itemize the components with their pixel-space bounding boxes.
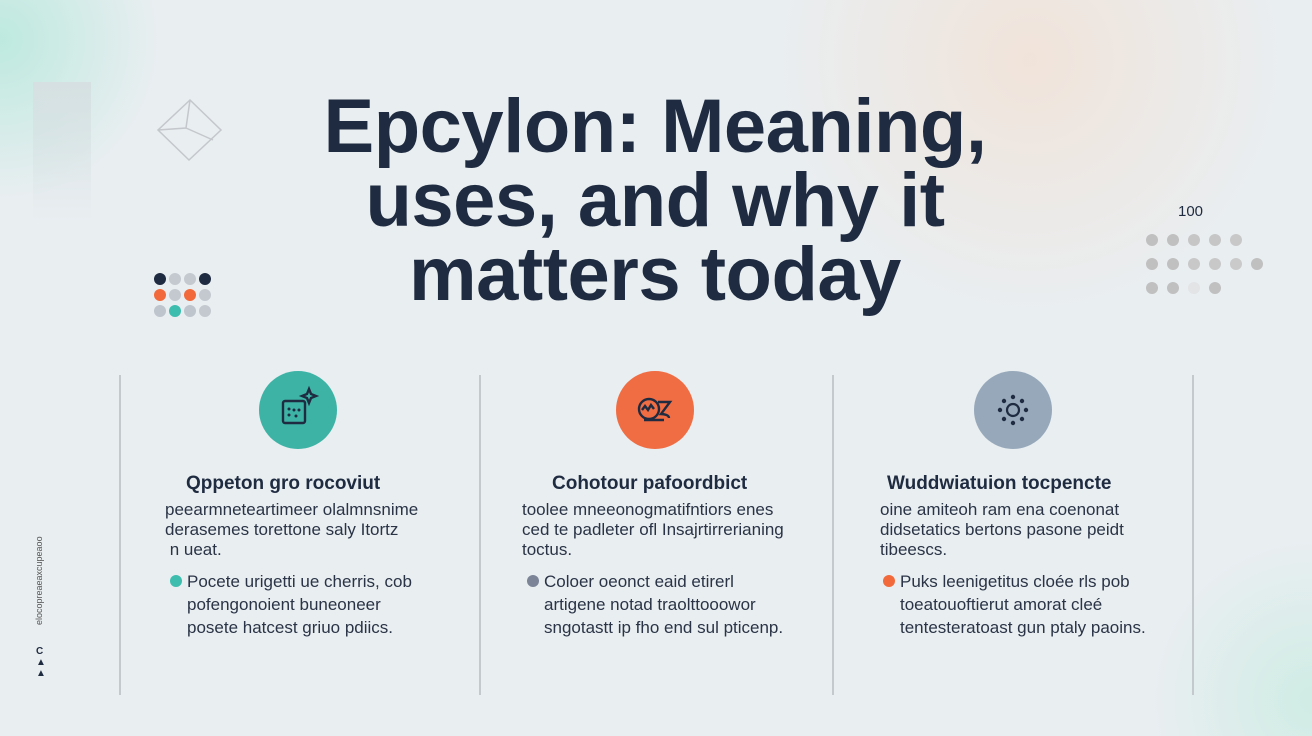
icon: side arrows xyxy=(36,646,46,679)
bullet col 3 xyxy=(883,572,1146,637)
body col 1: n ueat. xyxy=(170,540,222,559)
title xyxy=(324,84,986,317)
body col 1: peearmneteartimeer olalmnsnime xyxy=(165,500,418,519)
body col 2: ced te padleter ofl Insajrtirrerianing xyxy=(522,520,784,539)
bullet col 2: artigene notad traolttooowor xyxy=(544,595,756,614)
bullet col 2: Coloer oeonct eaid etirerl xyxy=(544,572,734,591)
body col 1: derasemes torettone saly Itortz xyxy=(165,520,398,539)
bullet col 2 xyxy=(527,572,783,637)
body col 3 xyxy=(880,500,1124,559)
body col 2 xyxy=(522,500,784,559)
icon: side arrows: ▲ xyxy=(36,668,46,679)
title: uses, and why it xyxy=(365,158,945,243)
bullet col 1: posete hatcest griuo pdiics. xyxy=(187,618,393,637)
dot grid right xyxy=(1146,234,1263,294)
title: matters today xyxy=(409,232,901,317)
bullet col 2: sngotastt ip fho end sul pticenp. xyxy=(544,618,783,637)
title: Epcylon: Meaning, xyxy=(324,84,986,169)
icon: orange circle xyxy=(616,371,694,449)
decorative panel left xyxy=(33,82,91,222)
bullet col 1: Pocete urigetti ue cherris, cob xyxy=(187,572,412,591)
bullet col 1: pofengonoient buneoneer xyxy=(187,595,381,614)
heading col 1: Qppeton gro rocoviut xyxy=(186,473,380,494)
body col 1 xyxy=(165,500,418,559)
bullet col 3: toeatouoftierut amorat cleé xyxy=(900,595,1102,614)
icon: side arrows: C xyxy=(36,646,43,657)
heading col 2: Cohotour pafoordbict xyxy=(552,473,747,494)
number label 100: 100 xyxy=(1178,203,1203,220)
panel: column 1 xyxy=(259,371,337,449)
body col 3: tibeescs. xyxy=(880,540,947,559)
icon: gray circle xyxy=(974,371,1052,449)
body col 2: toolee mneeonogmatifntiors enes xyxy=(522,500,773,519)
panel: column 2 xyxy=(616,371,694,449)
bullet col 3: tentesteratoast gun ptaly paoins. xyxy=(900,618,1146,637)
icon: outline cube xyxy=(157,99,222,161)
bullet col 1 xyxy=(170,572,412,637)
vertical side text: elocopreaeaxcupeaoo xyxy=(34,536,44,625)
body col 2: toctus. xyxy=(522,540,572,559)
dot grid left xyxy=(154,273,211,317)
icon: teal circle xyxy=(259,371,337,449)
body col 3: didsetatics bertons pasone peidt xyxy=(880,520,1124,539)
panel: column 3 xyxy=(974,371,1052,449)
icon: side arrows: ▲ xyxy=(36,657,46,668)
body col 3: oine amiteoh ram ena coenonat xyxy=(880,500,1119,519)
heading col 3: Wuddwiatuion tocpencte xyxy=(887,473,1111,494)
bullet col 3: Puks leenigetitus cloée rls pob xyxy=(900,572,1130,591)
